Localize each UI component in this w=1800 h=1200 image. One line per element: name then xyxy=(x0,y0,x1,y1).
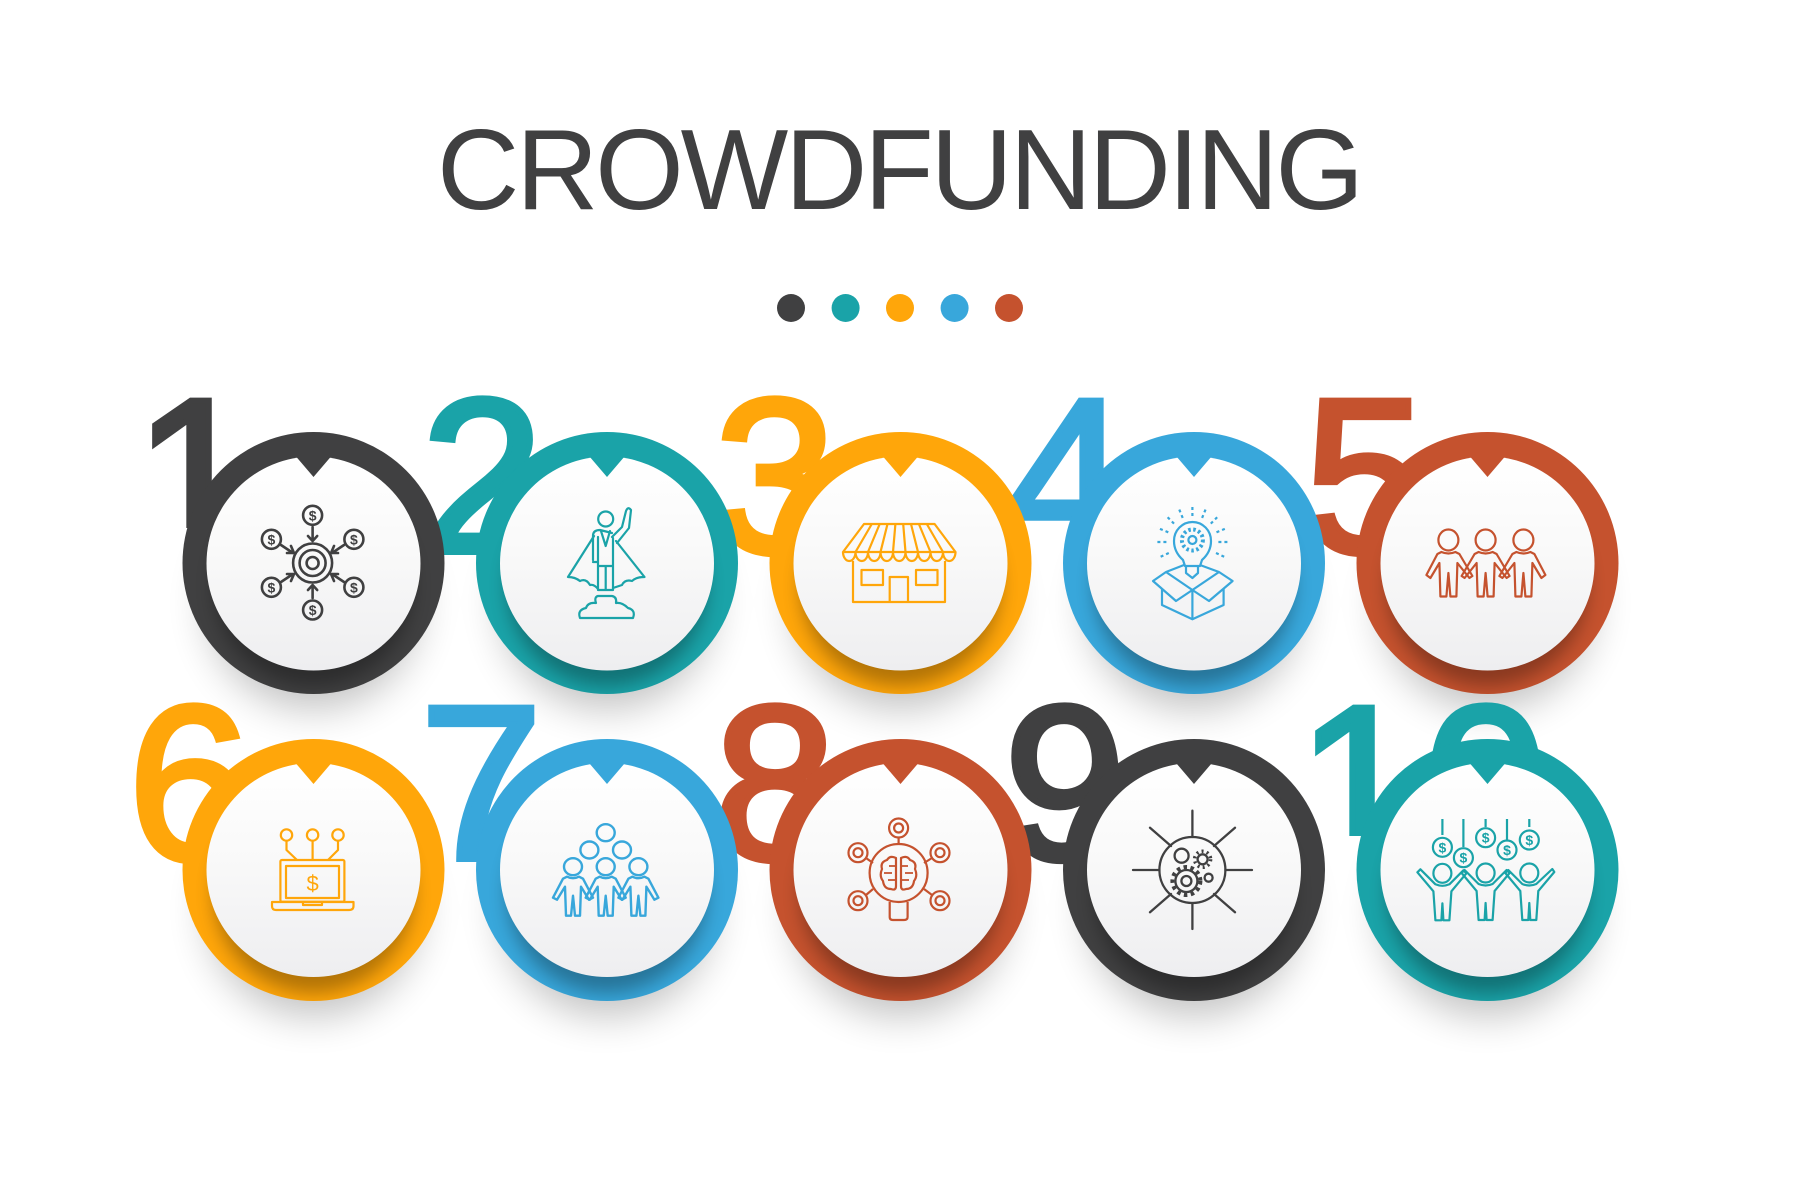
ring 8 xyxy=(770,739,1032,1001)
icon: superhero businessman xyxy=(568,508,644,618)
numeral 4: 4 xyxy=(1006,353,1128,599)
numeral 6: 6 xyxy=(128,660,250,906)
colour dots xyxy=(777,294,1023,322)
icon: light bulb idea box xyxy=(1153,505,1233,619)
icon: funds to target xyxy=(262,506,363,620)
ring 2 xyxy=(476,432,738,694)
numeral 8: 8 xyxy=(714,660,836,906)
icon: laptop with dollar: $ xyxy=(306,871,319,896)
icon: funds to target: $ xyxy=(350,531,358,547)
icon: store xyxy=(843,524,956,602)
icon: funds to target: $ xyxy=(309,602,317,618)
icon: brain network xyxy=(848,818,950,920)
ring 4 xyxy=(1063,432,1325,694)
icon: funds to target: $ xyxy=(350,579,358,595)
title: CROWDFUNDING xyxy=(437,107,1364,234)
numeral 2: 2 xyxy=(421,353,543,599)
numeral 5: 5 xyxy=(1304,353,1426,599)
icon: gears and spokes xyxy=(1133,811,1252,929)
numeral 3: 3 xyxy=(714,353,836,599)
icon: crowd with falling coins: $ xyxy=(1439,839,1447,855)
icon: crowd with falling coins: $ xyxy=(1503,842,1511,858)
ring 9 xyxy=(1063,739,1325,1001)
numeral 7: 7 xyxy=(420,660,542,906)
ring 1 xyxy=(182,432,444,694)
icon: crowd with falling coins: $ xyxy=(1482,830,1490,846)
ring 6 xyxy=(182,739,444,1001)
icon: crowd with falling coins xyxy=(1417,819,1554,920)
icon: funds to target: $ xyxy=(268,531,276,547)
icon: funds to target: $ xyxy=(309,507,317,523)
ring 10 xyxy=(1356,739,1618,1001)
drop shadows xyxy=(208,497,1594,1016)
ring 3 xyxy=(770,432,1032,694)
icon: three people xyxy=(1426,530,1545,596)
numeral 9: 9 xyxy=(1004,660,1126,906)
icon: crowd with falling coins: $ xyxy=(1460,850,1468,866)
ring 7 xyxy=(476,739,738,1001)
icon: funds to target: $ xyxy=(268,579,276,595)
icon: crowd with falling coins: $ xyxy=(1525,832,1533,848)
numeral 10: 10 xyxy=(1297,660,1547,906)
numeral 1: 1 xyxy=(134,353,256,599)
large numerals xyxy=(136,395,1538,864)
icon: group of six people xyxy=(553,824,658,916)
ring 5 xyxy=(1356,432,1618,694)
icon: laptop with dollar xyxy=(272,829,354,910)
